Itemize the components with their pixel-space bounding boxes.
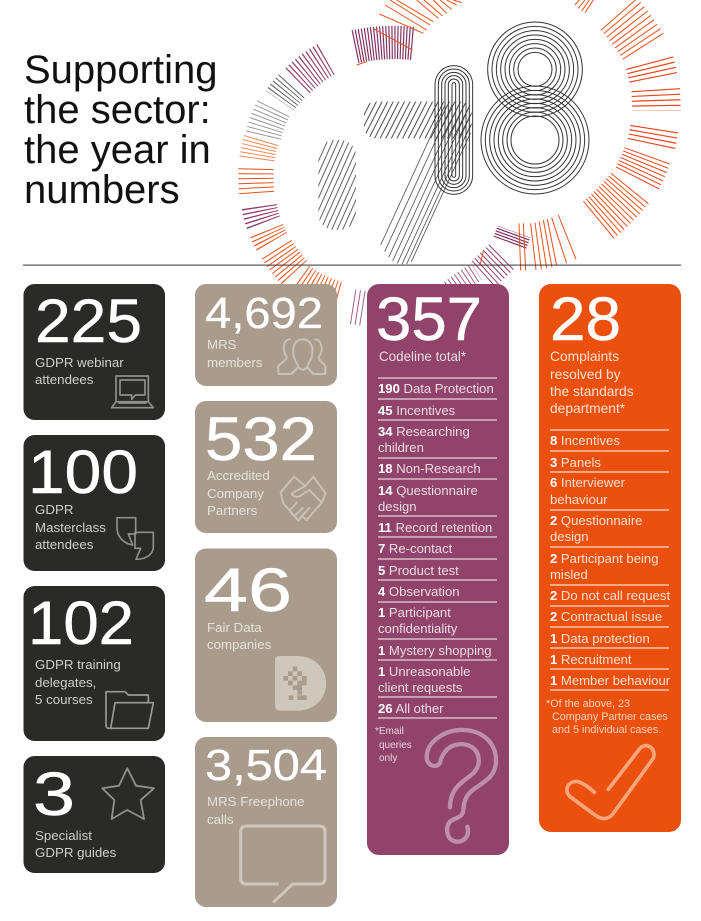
figure: 7 diagonal leg lines <box>381 105 471 264</box>
icon: handshake <box>281 477 326 521</box>
figure: hatched 6 block <box>318 140 356 230</box>
list: codeline categories: confidentiality <box>378 621 458 636</box>
footnote: only <box>379 753 397 764</box>
list: codeline categories: 11 Record retention <box>378 520 492 535</box>
list: complaint categories: 1 Recruitment <box>550 652 632 667</box>
label: delegates, <box>35 675 96 690</box>
panel: Fair Data companies <box>195 548 337 722</box>
radial tick ring graphic <box>256 0 656 308</box>
panel: GDPR training delegates <box>24 586 165 741</box>
label: resolved by <box>550 367 621 382</box>
stat: 357: 357 <box>376 285 482 353</box>
panel: Codeline total <box>367 284 509 855</box>
footnote: and 5 individual cases. <box>552 724 661 736</box>
label: 5 courses <box>35 692 93 707</box>
label: the standards <box>550 384 634 399</box>
large line-art figures 6 7 1 8 <box>318 22 589 264</box>
stat: 225: 225 <box>35 287 142 355</box>
list: complaint categories: 3 Panels <box>550 455 601 470</box>
panel: MRS members <box>195 284 337 386</box>
list: complaint categories: 2 Questionnaire <box>550 513 642 528</box>
label: MRS <box>207 337 237 352</box>
title: the year in <box>24 128 211 172</box>
panel: Accredited Company Partners <box>195 401 337 533</box>
list: codeline categories: 34 Researching <box>378 424 470 439</box>
label: Company <box>207 486 264 501</box>
panel: Complaints resolved <box>539 284 681 832</box>
list: codeline categories: 18 Non-Research <box>378 461 481 476</box>
title: numbers <box>24 168 180 212</box>
divider rule <box>23 265 681 266</box>
label: Masterclass <box>35 520 106 535</box>
list: codeline categories: 14 Questionnaire <box>378 483 478 498</box>
label: attendees <box>35 537 94 552</box>
stat: 102: 102 <box>28 589 134 657</box>
label: companies <box>207 637 272 652</box>
list: codeline categories: 1 Unreasonable <box>378 664 470 679</box>
list: complaint categories: 1 Data protection <box>550 631 650 646</box>
list: complaint categories: 8 Incentives <box>550 433 620 448</box>
stat: 4,692: 4,692 <box>205 289 323 338</box>
footnote: *Email <box>375 726 404 737</box>
list: complaint categories: 6 Interviewer <box>550 475 625 490</box>
label: GDPR webinar <box>35 355 124 370</box>
label: attendees <box>35 372 94 387</box>
list: complaint categories: 2 Contractual issue <box>550 609 662 624</box>
list: codeline categories: 1 Participant <box>378 605 451 620</box>
list: complaint categories: design <box>550 529 589 544</box>
list: codeline categories: design <box>378 499 417 514</box>
label: Codeline total* <box>379 349 466 364</box>
label: members <box>207 355 263 370</box>
label: Complaints <box>550 349 619 364</box>
label: Fair Data <box>207 620 262 635</box>
panel: Specialist GDPR guides <box>24 756 165 873</box>
list: codeline categories: 7 Re-contact <box>378 541 452 556</box>
icon: star <box>102 768 154 819</box>
list: codeline categories: 5 Product test <box>378 563 459 578</box>
label: GDPR <box>35 502 73 517</box>
list: complaint categories: 1 Member behaviour <box>550 673 670 688</box>
icon: check mark <box>567 746 654 819</box>
icon: folder <box>106 692 153 728</box>
title: the sector: <box>24 88 211 132</box>
stat: 3: 3 <box>33 760 75 828</box>
stat: 532: 532 <box>205 405 317 473</box>
stat: 100: 100 <box>28 438 138 506</box>
icon: laptop <box>112 376 153 408</box>
stat: 46: 46 <box>204 556 292 624</box>
label: department* <box>550 401 626 416</box>
icon: people <box>278 339 325 374</box>
list: codeline categories: client requests <box>378 680 463 695</box>
list: codeline categories <box>378 378 497 718</box>
label: Accredited <box>207 468 270 483</box>
label: GDPR guides <box>35 845 117 860</box>
list: complaint categories <box>550 430 671 690</box>
label: Specialist <box>35 828 92 843</box>
list: complaint categories: 2 Participant being <box>550 551 658 566</box>
label: MRS Freephone <box>207 794 305 809</box>
icon: Fair Data D logo <box>275 656 326 711</box>
figure: concentric 8 <box>481 22 589 194</box>
label: Partners <box>207 503 258 518</box>
list: complaint categories: 2 Do not call request <box>550 588 670 603</box>
list: codeline categories: 4 Observation <box>378 584 460 599</box>
figure: hatched 7 bar <box>364 102 472 138</box>
panel: GDPR Masterclass attendees <box>24 435 165 571</box>
panel: MRS Freephone calls <box>195 737 337 907</box>
footnote: queries <box>379 740 412 751</box>
title: Supporting <box>24 48 217 92</box>
list: complaint categories: behaviour <box>550 492 608 507</box>
list: codeline categories: 1 Mystery shopping <box>378 643 492 658</box>
icon: question mark <box>427 730 496 842</box>
figure: concentric pill 1 <box>435 66 473 194</box>
panel: GDPR webinar attendees <box>24 284 165 420</box>
list: complaint categories: misled <box>550 567 588 582</box>
icon: quotation marks <box>117 518 153 559</box>
list: codeline categories: 26 All other <box>378 701 444 716</box>
footnote: Company Partner cases <box>552 711 668 723</box>
stat: 28: 28 <box>550 285 621 353</box>
list: codeline categories: 190 Data Protection <box>378 381 494 396</box>
list: codeline categories: children <box>378 440 424 455</box>
footnote: *Of the above, 23 <box>546 698 630 710</box>
label: GDPR training <box>35 657 121 672</box>
stat: 3,504: 3,504 <box>205 741 327 790</box>
list: codeline categories: 45 Incentives <box>378 403 455 418</box>
label: calls <box>207 812 234 827</box>
icon: speech bubble <box>241 826 325 902</box>
